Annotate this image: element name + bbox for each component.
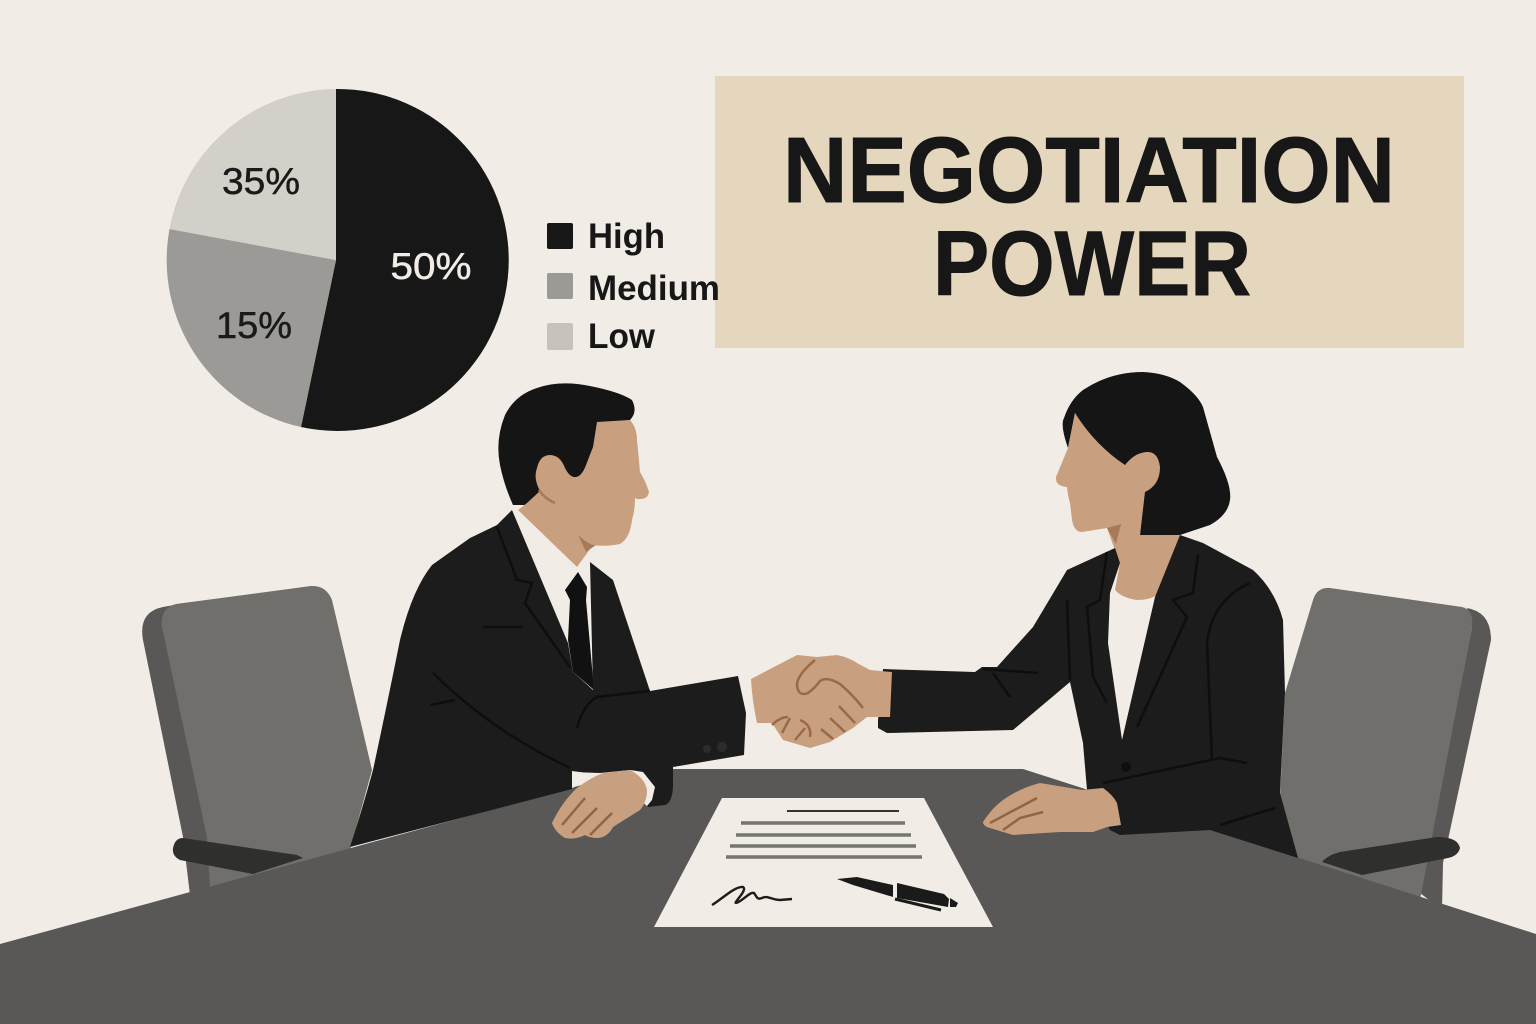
right chair: [1280, 588, 1491, 910]
pie chart: 35%: [222, 161, 300, 202]
signature: [712, 887, 792, 905]
man: neck and face: [518, 420, 649, 567]
man: shirt: [512, 510, 594, 690]
contract document: [654, 798, 993, 927]
man's hand on table: [552, 770, 647, 839]
title banner: NEGOTIATION: [783, 118, 1395, 222]
woman: hair: [1063, 372, 1230, 535]
legend: [547, 217, 720, 356]
woman's hand on table: [983, 783, 1121, 835]
conference table: [0, 769, 1536, 1024]
legend: Medium: [588, 269, 720, 308]
handshake: [751, 655, 892, 748]
man: shirt cuff: [572, 771, 602, 788]
woman: jacket and sleeve: [878, 535, 1298, 858]
title banner: POWER: [933, 213, 1251, 315]
pen: [837, 877, 958, 910]
woman: blouse: [1108, 590, 1160, 742]
woman in suit: [878, 372, 1298, 858]
man: tie: [565, 572, 594, 690]
legend: High: [588, 217, 665, 256]
man in suit: [350, 383, 746, 847]
left chair: [142, 586, 372, 895]
man: hair: [498, 383, 635, 505]
pie chart: [167, 89, 509, 431]
pie chart: 15%: [216, 305, 292, 346]
woman: neck and face: [1056, 413, 1180, 600]
pie chart: 50%: [390, 246, 472, 287]
title banner: [715, 76, 1464, 348]
man: jacket and sleeve: [350, 510, 746, 847]
legend: Low: [588, 317, 656, 356]
